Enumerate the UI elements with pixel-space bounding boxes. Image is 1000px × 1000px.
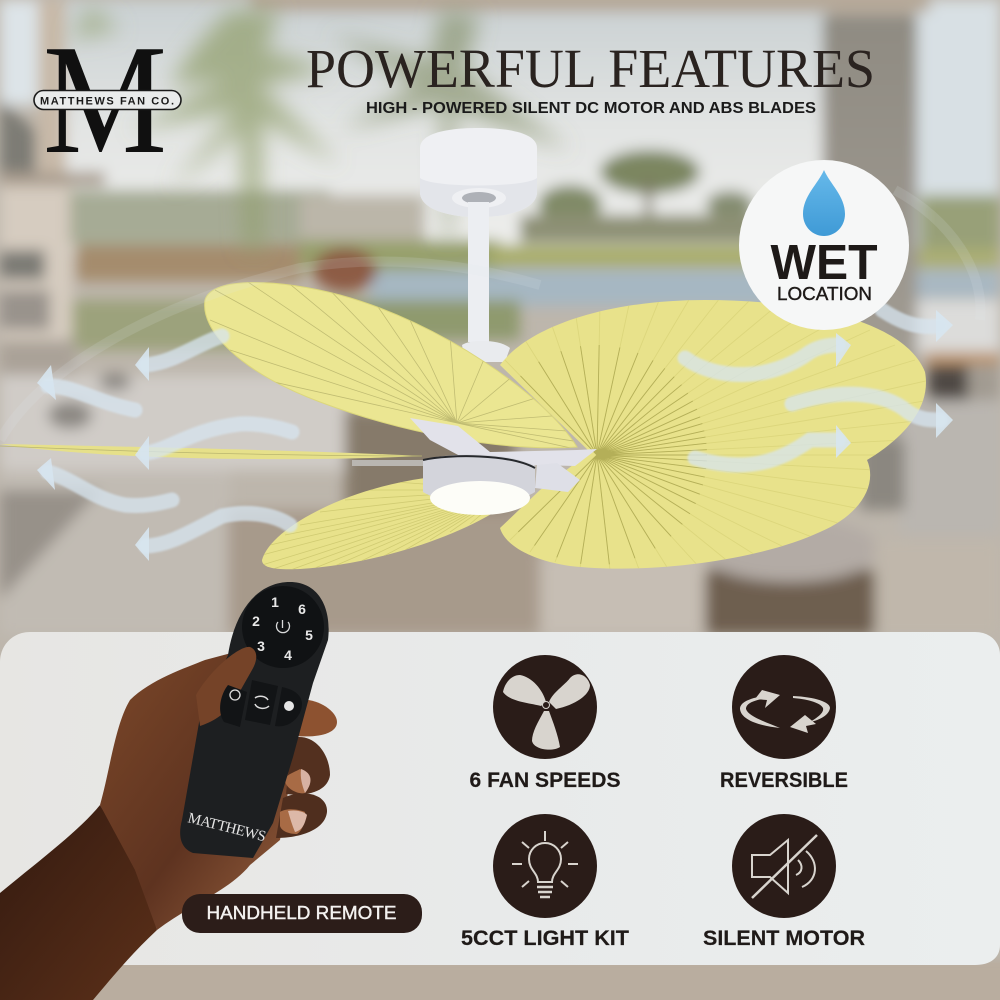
airflow arrows [0, 190, 980, 561]
feature: silent motor [703, 814, 865, 950]
feature: 6 fan speeds [470, 655, 620, 792]
title: POWERFUL FEATURES [306, 38, 875, 99]
remote brand text: MATTHEWS [186, 810, 268, 845]
arm [0, 805, 157, 1000]
remote dial: 3 [257, 638, 265, 654]
feature: 5CCT light kit: 5CCT LIGHT KIT [461, 927, 629, 950]
handheld remote label: HANDHELD REMOTE [206, 903, 396, 923]
handheld remote label [182, 894, 422, 933]
remote dial: 1 [271, 594, 279, 610]
remote dial: 5 [305, 627, 313, 643]
fan blade: lower left [262, 478, 490, 570]
remote dial [242, 586, 324, 668]
wet location badge: WET [770, 236, 878, 290]
fan blade: edge-on left [0, 444, 426, 466]
icon: water drop [803, 170, 845, 236]
fan blade: right [500, 298, 930, 572]
feature: reversible [720, 655, 848, 792]
back of hand [100, 648, 300, 930]
icon: muted speaker [752, 835, 817, 898]
features panel [0, 632, 1000, 965]
fan canopy and downrod [420, 128, 537, 362]
remote dial: 4 [284, 647, 292, 663]
remote dial: 2 [252, 613, 260, 629]
fan motor and light [410, 418, 597, 515]
logo: Matthews Fan Co.: M [43, 12, 167, 186]
remote control body [180, 582, 329, 858]
logo: Matthews Fan Co.: MATTHEWS FAN CO. [40, 96, 174, 108]
remote dial: 6 [298, 601, 306, 617]
icon: light bulb [512, 831, 578, 897]
subtitle: HIGH - POWERED SILENT DC MOTOR AND ABS BLADES [366, 100, 816, 117]
feature: silent motor: SILENT MOTOR [703, 927, 865, 950]
feature: 5CCT light kit [461, 814, 629, 950]
wet location badge [739, 160, 909, 330]
hand holding remote [0, 582, 337, 1000]
fingers [276, 700, 337, 838]
remote thumb [196, 647, 256, 726]
wet location badge: LOCATION [777, 284, 872, 304]
ceiling fan [0, 128, 930, 572]
feature: 6 fan speeds: 6 FAN SPEEDS [470, 769, 620, 792]
icon: fan [503, 674, 590, 750]
icon: reverse arrows [740, 690, 830, 733]
feature: reversible: REVERSIBLE [720, 769, 848, 792]
fan blade: upper left [205, 280, 580, 450]
remote lower buttons [220, 680, 302, 727]
